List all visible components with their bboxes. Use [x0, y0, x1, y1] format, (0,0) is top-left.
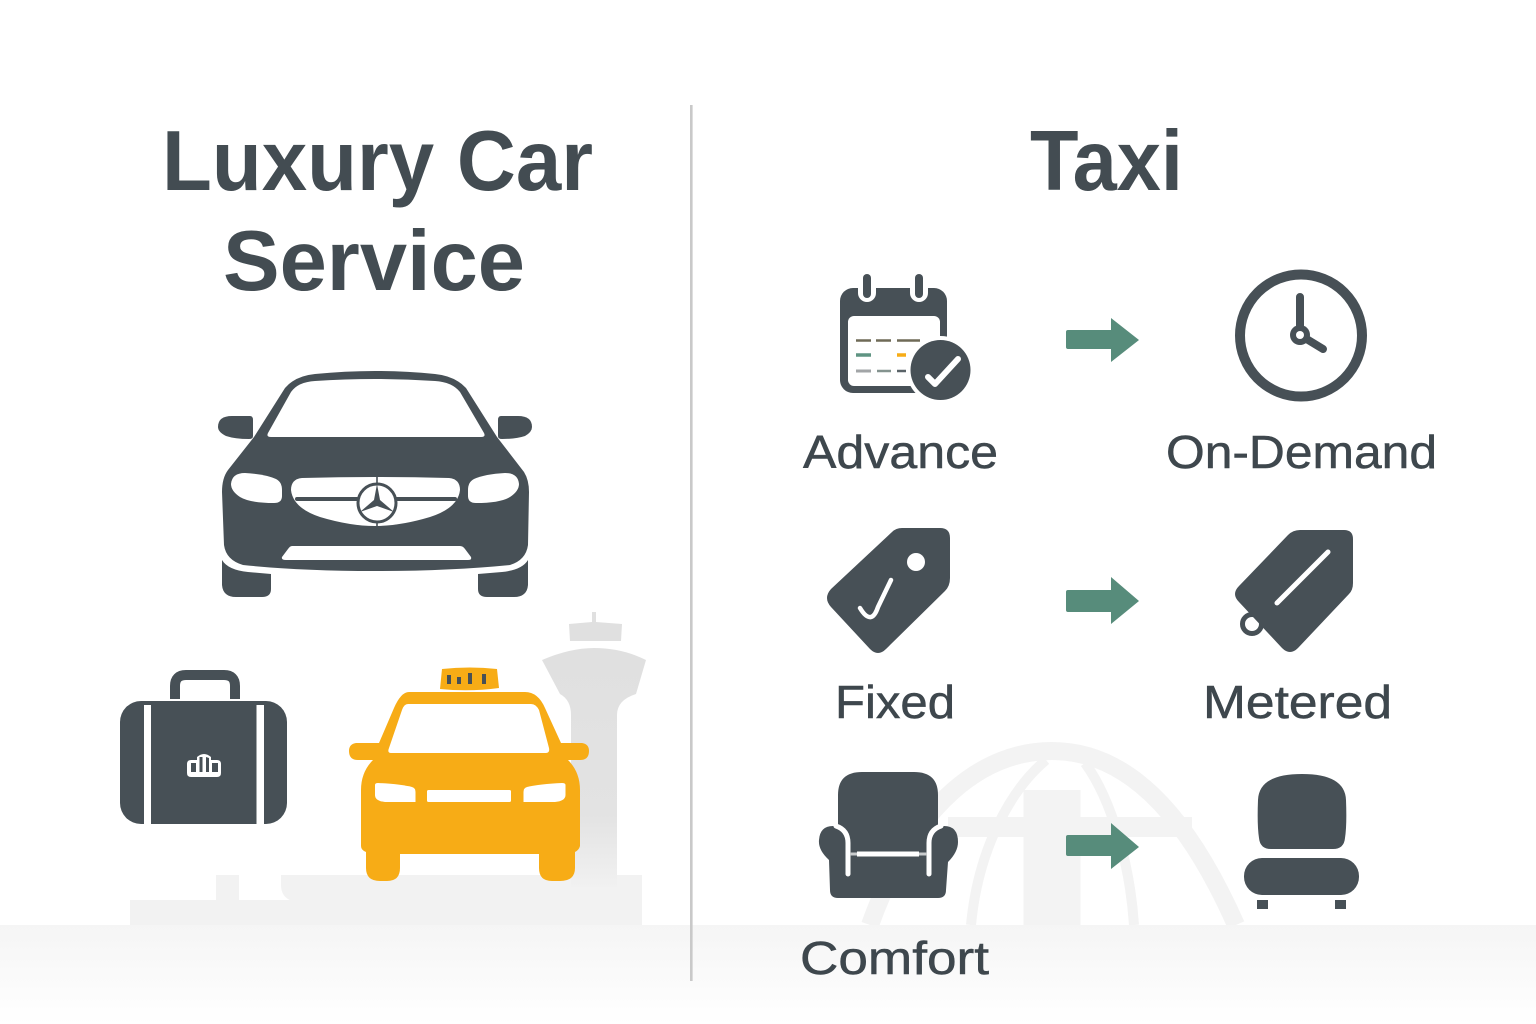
icon: price tag with check: [827, 528, 950, 653]
icon: calendar with check: [840, 270, 974, 404]
icon: clock: [1240, 274, 1362, 396]
ground band: [0, 925, 1536, 1024]
arrow 2: [1066, 577, 1139, 624]
label: Fixed: Fixed: [835, 676, 955, 728]
row 2: fixed to metered: [827, 528, 1392, 728]
heading: Luxury Car Service: Service: [223, 214, 525, 309]
label: Comfort: Comfort: [800, 932, 989, 984]
background: dome terminal silhouette: [870, 751, 1236, 925]
row 1: advance to on-demand: [803, 270, 1437, 478]
label: Metered: Metered: [1203, 676, 1392, 728]
label: On-Demand: On-Demand: [1166, 426, 1437, 478]
heading: Luxury Car Service: Luxury Car: [162, 114, 593, 209]
label: Advance: Advance: [803, 426, 998, 478]
icon: armchair: [819, 772, 958, 898]
background: airport terminal and control tower silhouette: [130, 612, 646, 926]
center divider: [690, 105, 693, 981]
icon: simple seat: [1244, 774, 1359, 909]
arrow 3: [1066, 823, 1139, 869]
heading: Taxi: Taxi: [1030, 114, 1183, 209]
icon: suitcase: [120, 675, 287, 824]
icon: price tag with slash: [1235, 530, 1353, 652]
icon: yellow taxi: [349, 668, 589, 881]
heading: Luxury Car Service: [162, 114, 593, 309]
arrow 1: [1066, 318, 1139, 362]
row 3: comfort: [800, 772, 1359, 984]
icon: luxury car front: [218, 371, 532, 597]
